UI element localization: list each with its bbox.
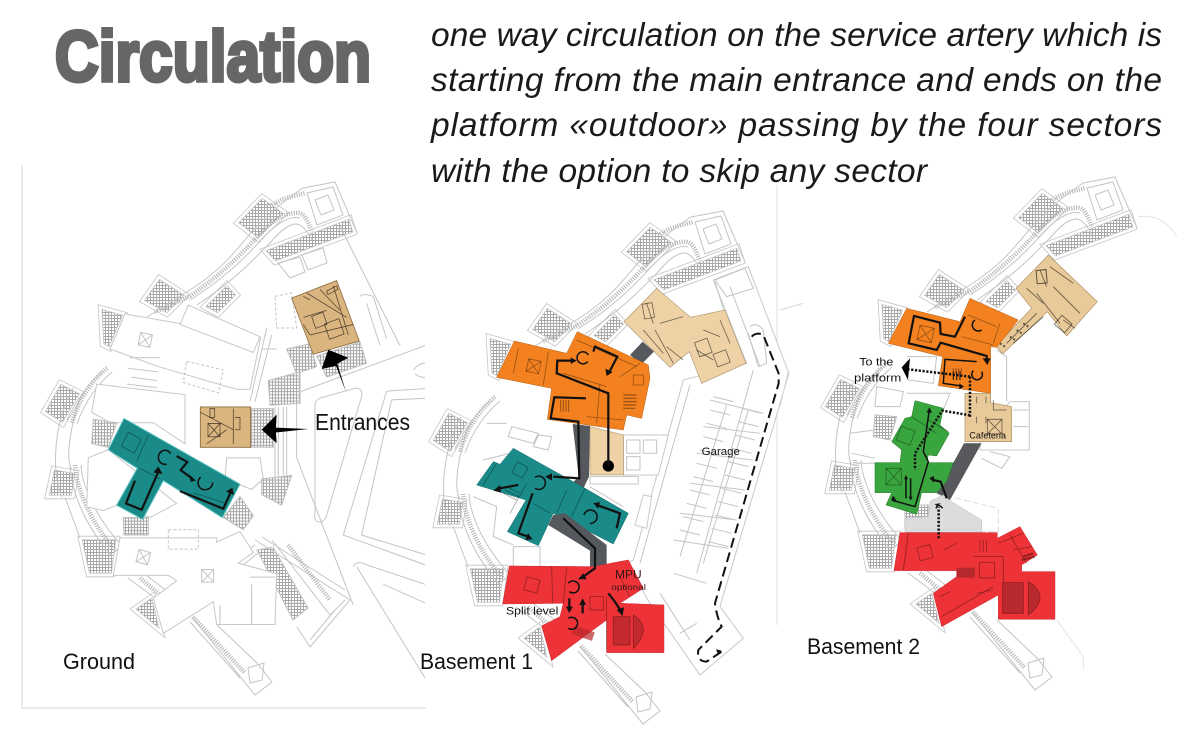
sector: tan cafeteria <box>965 393 1012 442</box>
circulation path basement 1 <box>493 334 779 662</box>
sector: green <box>875 401 953 514</box>
sector: red <box>503 560 664 661</box>
tan details <box>642 303 730 367</box>
description text <box>430 17 1162 190</box>
sector: light grey zone <box>905 495 982 532</box>
label: Ground: Ground <box>63 649 135 674</box>
sector: tan upper <box>624 288 746 383</box>
plan: basement 1 outline <box>431 211 745 724</box>
tan details <box>303 286 353 339</box>
orange details <box>917 315 1000 373</box>
green details <box>886 417 948 485</box>
theatre seating <box>613 615 643 648</box>
cafeteria details <box>977 397 1007 434</box>
label: optional: optional <box>611 582 646 592</box>
label: Basement 1: Basement 1 <box>420 649 533 674</box>
service rooms <box>473 423 668 567</box>
label: Split level: Split level <box>506 606 558 618</box>
ground frame <box>22 165 426 708</box>
site outline <box>780 216 1177 670</box>
sector: orange <box>888 298 1018 393</box>
dark connector center <box>571 424 590 489</box>
circulation arrows <box>126 450 234 510</box>
circulation path basement 2 <box>891 316 991 538</box>
plan: ground floor <box>87 226 430 686</box>
label: To the platform: To the <box>859 356 893 368</box>
ground outer site pieces <box>235 248 350 647</box>
site roads <box>297 226 430 686</box>
label: MPU: MPU <box>615 567 642 581</box>
sector: tan entrance upper <box>292 281 359 354</box>
description text: starting from the main entrance and ends on the <box>431 62 1162 99</box>
sector: teal ground <box>108 419 240 519</box>
arrow: to upper entrance <box>322 350 348 392</box>
plan: basement 1 <box>473 267 789 675</box>
dark connector <box>937 443 982 500</box>
tan details <box>1000 267 1080 347</box>
sector: orange <box>497 332 650 430</box>
white building blocks <box>87 293 297 633</box>
sector: tan upper <box>996 255 1097 354</box>
basement frame line <box>776 185 778 625</box>
label: Entrances: Entrances <box>315 409 410 435</box>
theatre seating <box>1003 582 1040 615</box>
red details <box>903 533 1035 617</box>
garage outline <box>627 267 789 675</box>
teal details <box>483 462 585 517</box>
arrow: to center entrance <box>262 415 308 443</box>
tan center details <box>200 409 240 444</box>
sector: tan entrance center <box>200 407 251 447</box>
description text: with the option to skip any sector <box>431 153 929 190</box>
sector: red <box>894 527 1055 627</box>
center site features <box>92 328 367 535</box>
ground base outline <box>43 182 357 695</box>
red details <box>524 567 630 650</box>
description text: platform «outdoor» passing by the four sectors <box>430 107 1162 144</box>
label: Cafeteria: Cafeteria <box>969 431 1006 441</box>
sector: teal <box>477 448 628 546</box>
title: Circulation <box>55 18 371 97</box>
dark connector upper <box>630 342 654 364</box>
sector: tan center <box>590 427 623 475</box>
sector details <box>121 432 227 503</box>
orange details <box>513 340 643 423</box>
label: To the platform: platform <box>854 372 901 384</box>
description text: one way circulation on the service artery which is <box>431 17 1162 54</box>
plan: basement 2 outline <box>823 177 1137 690</box>
label: Garage: Garage <box>702 446 740 458</box>
label: Basement 2: Basement 2 <box>807 634 920 659</box>
dark connector lower <box>548 513 607 567</box>
label: To the platform <box>854 356 901 384</box>
plan: basement 2 <box>780 216 1177 670</box>
